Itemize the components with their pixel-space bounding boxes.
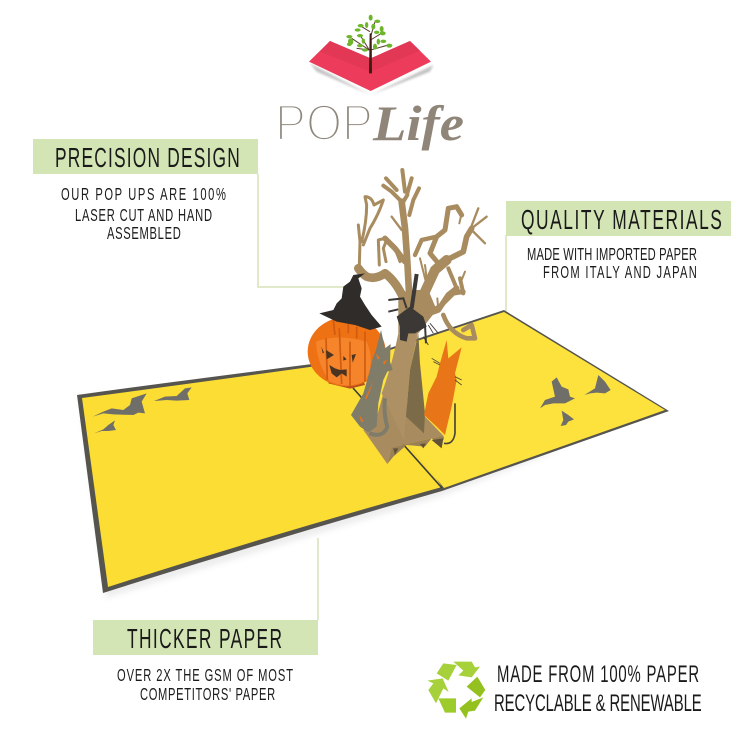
tree upper trunk join [398,290,437,333]
logo: Pop Life [275,15,464,151]
description: COMPETITORS' PAPER [140,684,275,705]
pumpkin [308,317,386,389]
description [527,244,697,283]
witch hat [319,273,382,330]
callout: quality materials [506,201,731,283]
connector line: thicker paper [317,538,319,620]
orange cat [424,340,462,444]
logo icon: open book with tree [309,15,433,95]
description: FROM ITALY AND JAPAN [543,262,697,283]
spider [388,274,438,345]
description: OVER 2X THE GSM OF MOST [117,665,293,686]
tree branches [358,170,487,317]
fold line [353,388,442,488]
description: OUR POP UPS ARE 100% [61,184,226,205]
tree base [363,393,443,464]
heading: THICKER PAPER [127,623,282,654]
connector line: quality materials [505,235,507,311]
description: MADE WITH IMPORTED PAPER [527,244,697,265]
bats: left panel [93,387,192,433]
popup scene: pumpkin, tree, cats [308,273,475,464]
heading: PRECISION DESIGN [55,142,240,173]
description: LASER CUT AND HAND [75,205,212,226]
bats: right panel [540,375,611,426]
recycling statement: MADE FROM 100% PAPER [497,662,699,688]
description [61,184,226,244]
grey cat [351,330,393,435]
heading: QUALITY MATERIALS [521,204,722,235]
logo wordmark: POP: POP [275,94,373,151]
card backing [77,310,669,593]
callout: precision design [33,139,258,244]
callout: thicker paper [93,620,318,705]
logo wordmark: Life: Life [372,95,464,151]
card shadow [80,402,560,598]
tree trunk [382,332,418,440]
icon: recycling arrows [427,662,485,719]
heading band [33,139,258,174]
description [117,665,293,705]
lower right branch [420,292,475,338]
pop-up card [77,170,669,598]
recycling statement [494,662,702,717]
recycling statement: RECYCLABLE & RENEWABLE [494,691,702,717]
connector line: precision design [258,174,345,287]
pumpkin face [321,347,356,377]
description: ASSEMBLED [107,223,181,244]
heading band [93,620,318,655]
heading band [506,201,731,236]
left yellow panel [82,360,442,587]
right yellow panel [345,312,665,488]
